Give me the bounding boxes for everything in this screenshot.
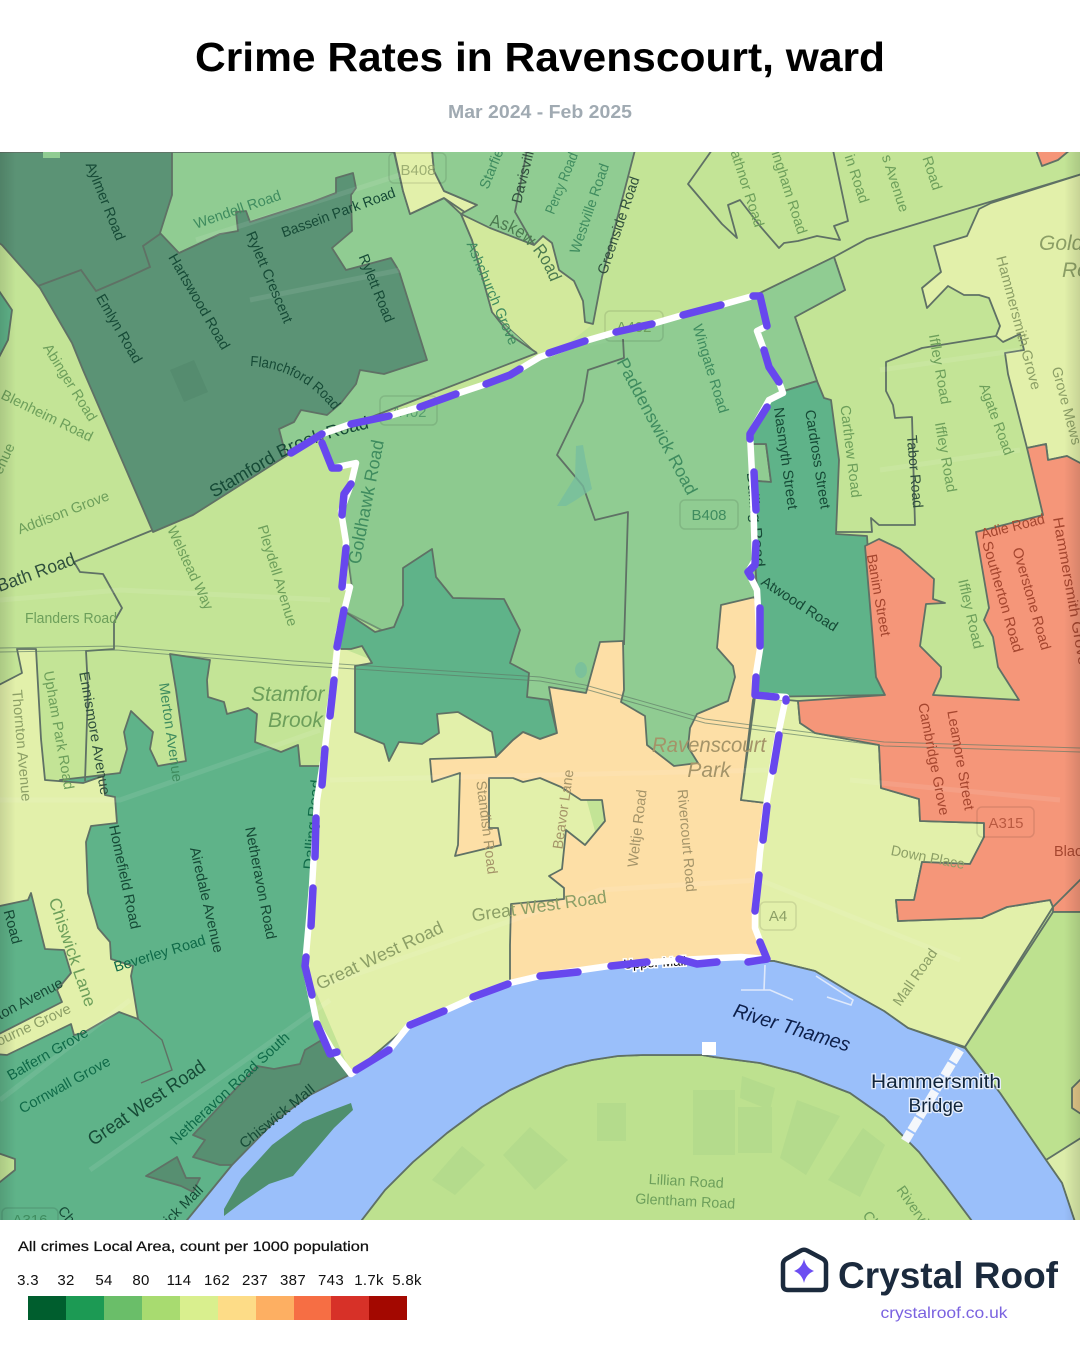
street labels: Upham Park Road <box>40 670 76 791</box>
street labels: Carthew Road <box>836 404 864 499</box>
street labels: Down Place <box>889 843 966 873</box>
street labels: Park <box>687 759 732 782</box>
pond: small <box>575 662 587 678</box>
street labels: Pleydell Avenue <box>254 523 300 628</box>
area: Askew wedge <box>461 214 593 355</box>
area: salmon top corner <box>1036 150 1070 166</box>
street labels: River Thames <box>731 1000 853 1056</box>
map edge shading right <box>1064 152 1080 1220</box>
street labels: Banim Street <box>863 553 893 638</box>
area: Nasmyth green <box>750 381 885 697</box>
area: orange ward core <box>430 597 767 983</box>
street labels: Rylett Crescent <box>242 229 295 326</box>
street labels: Riverview <box>893 1183 942 1244</box>
legend values: 114 <box>167 1272 191 1289</box>
area: Ravenscourt Park green <box>322 257 845 785</box>
street labels: Leamore Street <box>943 709 977 811</box>
street labels: Beavor Lane <box>551 769 578 850</box>
street labels: Cambridge Grove <box>914 702 952 817</box>
buildings: south bank <box>432 1076 885 1197</box>
area: park inner tone <box>322 426 382 631</box>
area: pale south ward <box>308 648 595 1070</box>
legend colour scale <box>28 1296 407 1320</box>
street labels: Hammersmith Grove <box>992 254 1043 392</box>
area: top-left light patch <box>43 152 60 158</box>
area: dark north-west Bedford Park <box>0 152 427 532</box>
legend values: 1.7k <box>354 1272 384 1289</box>
street labels: Addison Grove <box>15 488 112 538</box>
street labels: Bassein Park Road <box>280 185 398 241</box>
street labels: Overstone Road <box>1009 546 1053 652</box>
street labels: Rylett Road <box>355 252 397 325</box>
line: Ashchurch boundary <box>461 214 537 353</box>
river jetties <box>741 965 853 1005</box>
street labels: Great West Road <box>470 887 608 925</box>
street labels: Southerton Road <box>978 539 1025 654</box>
street labels: Greenside Road <box>595 175 643 277</box>
street labels: Upper Mall <box>623 953 687 972</box>
outline: Rathnor blocks <box>688 150 848 248</box>
logo wordmark: Crystal Roof <box>838 1255 1059 1296</box>
street labels: Askew Road <box>489 214 562 282</box>
street labels: Great West Road <box>313 917 446 994</box>
street labels: Percy Road <box>543 150 582 217</box>
street labels: Netheravon Road South <box>167 1030 293 1148</box>
legend values: 237 <box>242 1272 268 1289</box>
street labels: Bridge <box>909 1096 963 1117</box>
street labels: Stamford Brook Road <box>210 416 368 496</box>
line: salmon south-east boundary <box>1053 876 1080 907</box>
legend values: 54 <box>95 1272 113 1289</box>
street labels: s Avenue <box>878 153 911 214</box>
street labels: Glentham Road <box>635 1191 736 1213</box>
area: salmon east <box>798 444 1080 921</box>
line: eastern boundary road <box>760 174 1080 293</box>
street labels: Emlyn Road <box>92 292 145 366</box>
legend <box>17 1238 422 1320</box>
logo: Crystal Roof <box>783 1250 1059 1322</box>
area: B408 pale patch <box>394 150 477 217</box>
street labels: Ravenscourt <box>652 734 767 757</box>
outline: Carthew line <box>795 257 845 381</box>
street labels: Airedale Avenue <box>186 846 226 955</box>
map edge shading left <box>0 152 16 1220</box>
title: Crime Rates in Ravenscourt, ward <box>195 34 885 80</box>
area: SE pale <box>741 697 1053 1047</box>
legend values: 5.8k <box>392 1272 422 1289</box>
street labels: Wendell Road <box>192 188 283 233</box>
legend values: 162 <box>204 1272 230 1289</box>
legend values: 3.3 <box>17 1272 39 1289</box>
street labels: Starfield <box>477 136 512 191</box>
street labels: Chiswick Lane <box>45 895 100 1009</box>
street labels: Flanchford Road <box>251 356 341 410</box>
river pier <box>702 1042 716 1055</box>
street labels: Lillian Road <box>648 1172 724 1192</box>
street labels: Mall Road <box>890 946 941 1009</box>
street labels: Road <box>918 154 944 192</box>
street labels: B408 <box>691 507 727 524</box>
river Thames <box>183 957 1076 1225</box>
line: SW inner boundaries <box>138 1019 172 1083</box>
street labels: A315 <box>988 815 1024 832</box>
area: Chiswick Mall dark <box>193 1041 349 1165</box>
street labels: Road <box>0 908 24 946</box>
island: Chiswick Eyot <box>224 1103 353 1216</box>
road shields <box>2 153 1034 1238</box>
street labels: Cardross Street <box>801 409 833 510</box>
street labels: Agate Road <box>975 382 1016 458</box>
street labels: Standish Road <box>472 780 500 875</box>
street labels: Wingate Road <box>689 323 731 415</box>
legend values: 32 <box>57 1272 75 1289</box>
area: east bank green <box>965 912 1080 1160</box>
outline: Iffley blocks <box>836 336 996 532</box>
street labels: Iffley Road <box>931 421 959 494</box>
street labels: A402 <box>616 319 652 336</box>
ward boundary: white line <box>291 296 786 1074</box>
railway line <box>0 646 1080 752</box>
street labels: Adie Road <box>980 511 1047 543</box>
legend values: 387 <box>280 1272 306 1289</box>
street labels: Merton Avenue <box>155 682 185 783</box>
street labels: Paddenswick Road <box>613 354 702 498</box>
street labels: A4 <box>769 908 787 925</box>
roads overlay <box>0 175 1060 1170</box>
street labels: Goldhawk Road <box>344 438 388 566</box>
street labels: Great West Road <box>84 1056 210 1150</box>
street labels: Hartswood Road <box>165 251 232 353</box>
area: south bank <box>358 1055 975 1225</box>
street labels: Netheravon Road <box>241 826 279 941</box>
street labels: in Road <box>841 153 871 205</box>
street labels: Chiswick Mall <box>133 1183 207 1256</box>
street labels: Atwood Road <box>758 574 840 635</box>
street labels: Aylmer Road <box>82 160 128 243</box>
area: SW pale patch <box>0 1152 15 1186</box>
street labels: Welstead Way <box>163 524 216 613</box>
icon: house <box>783 1250 826 1290</box>
outline: Flanders boundary <box>74 530 153 781</box>
logo url: crystalroof.co.uk <box>880 1305 1009 1322</box>
street labels: Rathnor Road <box>723 138 766 229</box>
map base land <box>0 152 1080 1062</box>
street labels: Dalling Road <box>301 779 325 870</box>
street labels: Abinger Road <box>39 341 99 424</box>
street labels: Davisville <box>509 142 540 205</box>
street labels: Brook <box>268 709 324 732</box>
legend title: All crimes Local Area, count per 1000 population <box>18 1238 369 1254</box>
street labels: Cornwall Grove <box>17 1054 114 1117</box>
area: far east orange <box>1072 1076 1080 1116</box>
subtitle: date range: Mar 2024 - Feb 2025 <box>448 102 632 122</box>
area: Stamford Brook green in ward <box>337 549 557 761</box>
buildings: dark area block <box>170 360 208 402</box>
pond: Ravenscourt Park <box>557 445 592 506</box>
street labels: Hammersmith <box>871 1072 1001 1093</box>
street labels: Ch <box>55 1203 79 1227</box>
area: Hammersmith Grove pale <box>922 174 1080 465</box>
street labels: Balfern Grove <box>5 1025 91 1084</box>
street labels: Bingham Road <box>765 140 809 236</box>
street labels: Chiswick Mall <box>237 1082 318 1152</box>
Hammersmith Bridge <box>905 1050 960 1141</box>
ward boundary: purple dashes <box>291 296 786 1070</box>
street labels: Cl <box>859 1208 880 1229</box>
area: dark triangle <box>146 1157 200 1192</box>
area: Chiswick Lane pale <box>0 649 138 1055</box>
street labels: Stamfor <box>251 683 326 706</box>
street labels: Ashchurch Grove <box>463 239 521 348</box>
street labels: Nasmyth Street <box>770 406 800 511</box>
area: west blob <box>0 285 12 365</box>
street labels: A316 <box>12 1212 48 1229</box>
street labels: Blenheim Road <box>0 387 95 446</box>
street labels: Rivercourt Road <box>674 789 698 893</box>
area: northern green <box>150 152 537 456</box>
street labels: Iffley Road <box>925 333 953 406</box>
icon: star <box>794 1259 814 1283</box>
street labels: Westville Road <box>567 162 613 256</box>
street labels: Tabor Road <box>903 435 925 509</box>
line: Davisville boundary <box>515 150 534 245</box>
legend values: 80 <box>132 1272 150 1289</box>
street labels: Thornton Avenue <box>8 689 34 802</box>
area: Westville green <box>432 150 635 324</box>
street labels: A402 <box>391 404 427 421</box>
street labels: Flanders Road <box>25 611 117 627</box>
legend values: 743 <box>318 1272 344 1289</box>
street labels: Beverley Road <box>112 933 208 976</box>
line: park inner boundary <box>557 339 628 645</box>
street labels: Homefield Road <box>105 824 143 931</box>
street labels: Iffley Road <box>954 578 986 650</box>
area: far SE pale <box>1046 1136 1080 1225</box>
street labels: Dalling Road <box>743 472 767 568</box>
line: dark inner boundary <box>38 234 160 291</box>
street labels: B408 <box>400 162 436 179</box>
street labels: Weltje Road <box>625 789 651 868</box>
street labels: Ennismore Avenue <box>75 670 113 796</box>
area: SW green <box>0 654 351 1225</box>
legend values <box>17 1272 422 1289</box>
